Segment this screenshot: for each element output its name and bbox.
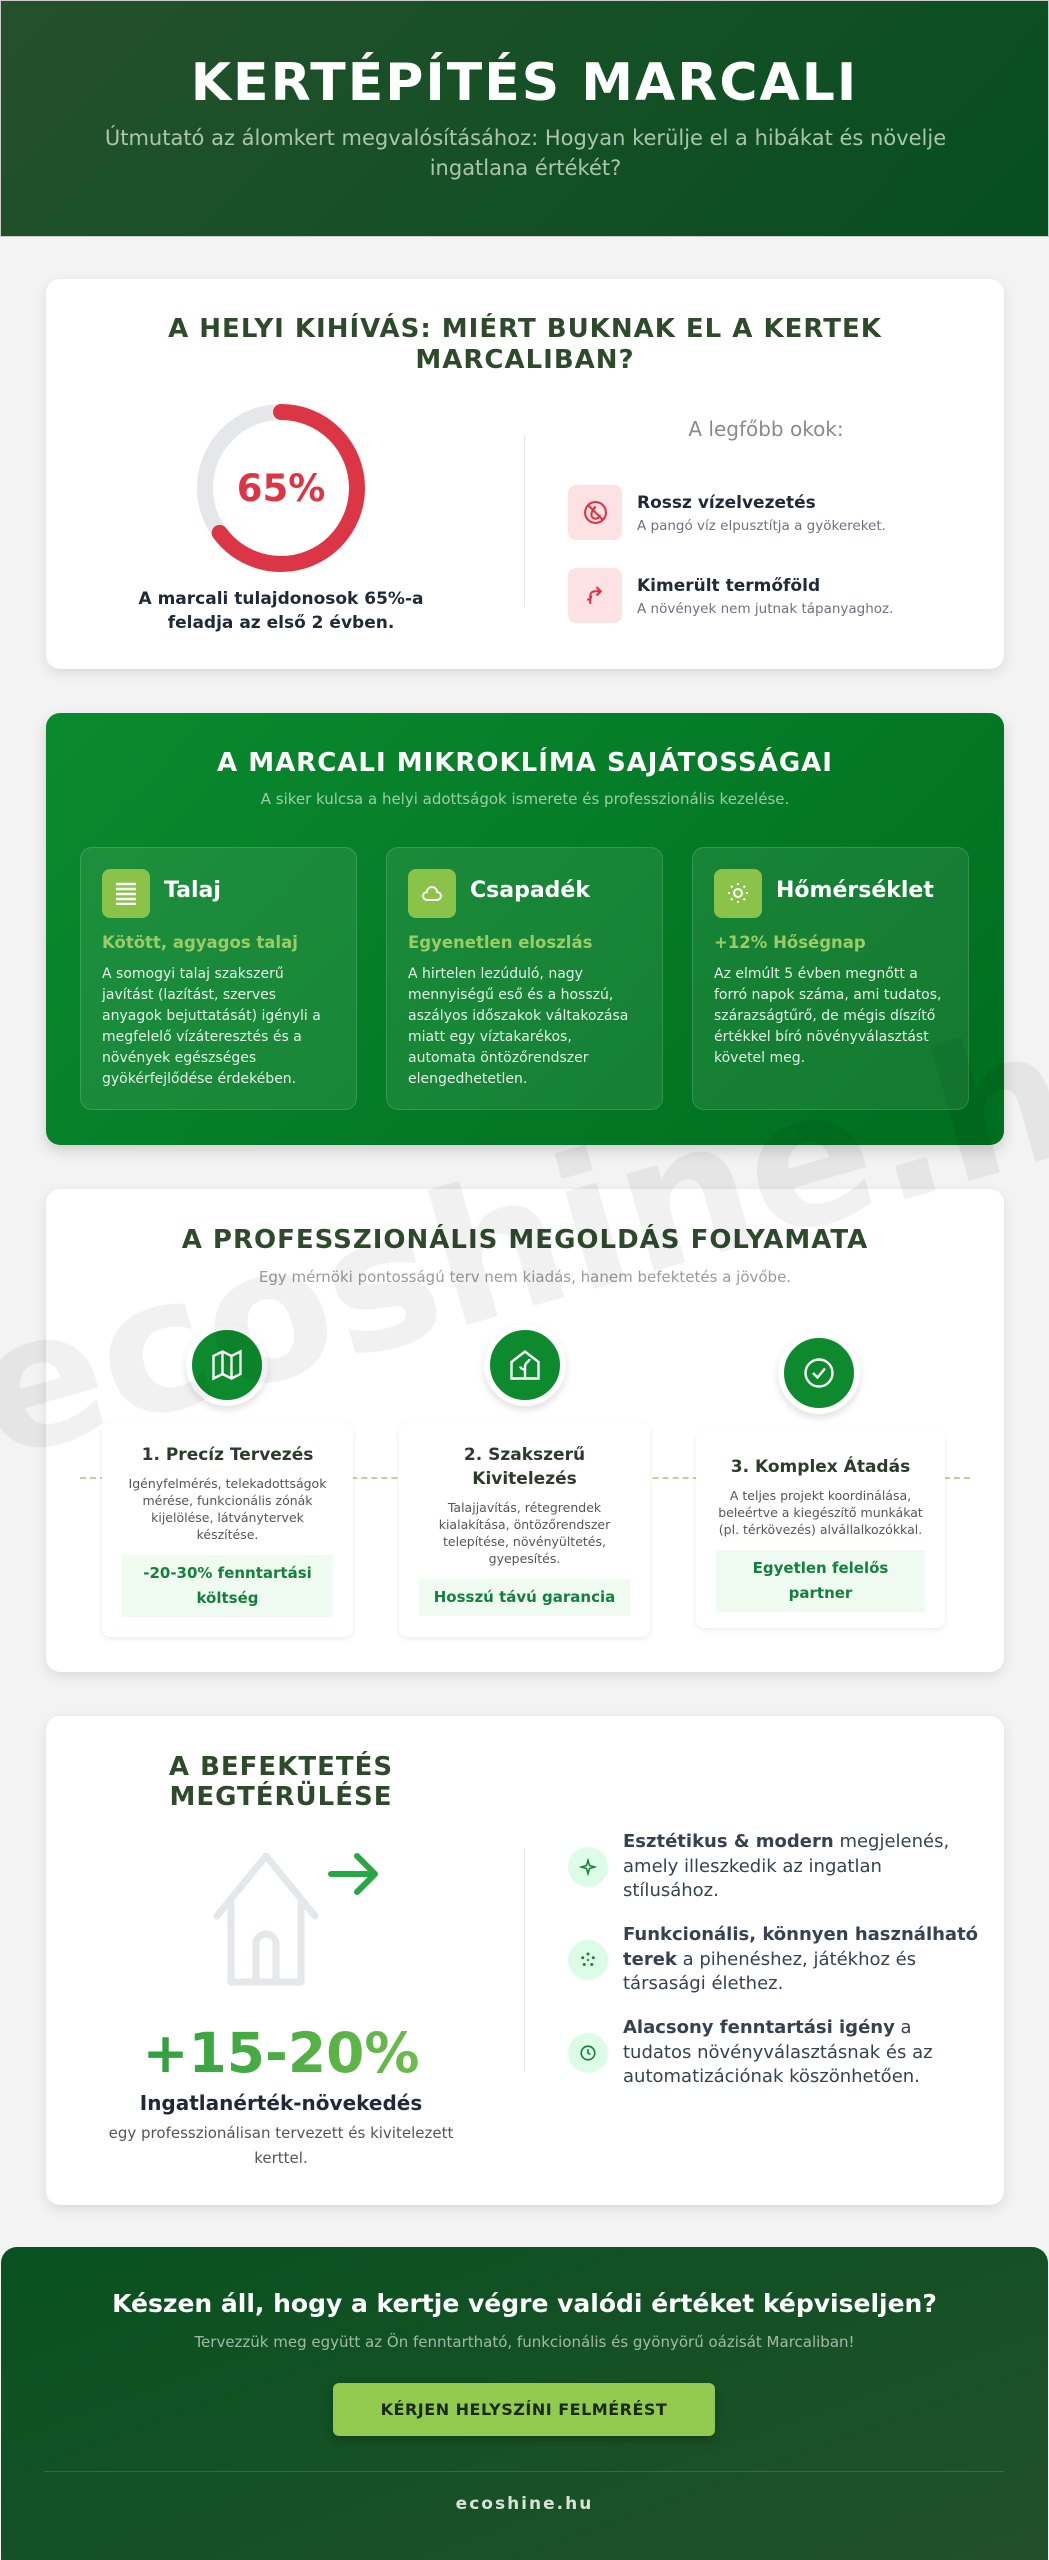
panel: ROI — [46, 1716, 1004, 2205]
card: soil — [80, 847, 357, 1110]
panel: local challenge — [46, 279, 1004, 669]
subheading: Egy mérnöki pontosságú terv nem kiadás, hanem befektetés a jövőbe. — [259, 1268, 791, 1286]
card: temperature: Hőmérséklet — [776, 878, 934, 903]
donut chart — [197, 404, 365, 572]
CTA heading: Készen áll, hogy a kertje végre valódi értéket képviseljen? — [112, 2289, 937, 2318]
stat label: Ingatlanérték-növekedés — [140, 2091, 422, 2115]
icon: soil layers — [102, 869, 150, 918]
reason: soil: Kimerült termőföld — [637, 576, 820, 596]
button: KÉRJEN HELYSZÍNI FELMÉRÉST — [381, 2400, 667, 2419]
heading: A HELYI KIHÍVÁS: MIÉRT BUKNAK EL A KERTEK — [168, 314, 882, 344]
header — [0, 0, 1049, 237]
card: rainfall: Egyenetlen eloszlás — [408, 933, 592, 952]
panel: microclimate — [46, 713, 1004, 1145]
reason: drainage: A pangó víz elpusztítja a gyökereket. — [637, 518, 886, 534]
card: temperature — [692, 847, 969, 1110]
step 3 card: Egyetlen felelős partner — [753, 1559, 888, 1602]
stat description: egy professzionálisan tervezett és kivitelezett kerttel. — [109, 2124, 453, 2167]
button — [333, 2383, 715, 2436]
big stat: +15-20% — [142, 2021, 420, 2085]
step 1 card: 1. Precíz Tervezés — [142, 1445, 313, 1465]
reason: soil: A növények nem jutnak tápanyaghoz. — [637, 601, 893, 617]
heading — [169, 1751, 393, 1812]
step 2 card: Hosszú távú garancia — [434, 1588, 615, 1606]
donut chart: 65% — [237, 467, 325, 510]
icon: house with arrow — [214, 1852, 378, 1986]
footer brand: ecoshine.hu — [456, 2494, 593, 2514]
step 3 card: 3. Komplex Átadás — [731, 1457, 910, 1477]
donut caption: A marcali tulajdonosok 65%-a feladja az első 2 évben. — [138, 589, 424, 633]
panel: ROI: Esztétikus & modern megjelenés, amely illeszkedik az ingatlan stílusához. — [623, 1831, 949, 1901]
heading — [168, 313, 882, 375]
subheading: A siker kulcsa a helyi adottságok ismerete és professzionális kezelése. — [261, 790, 789, 808]
card: soil: A somogyi talaj szakszerű javítást (lazítást, szerves anyagok bejuttatását) igényli a megfelelő vízáteresztés és a növények egészséges gyökérfejlődése érdekében. — [102, 966, 321, 1087]
icon: depleted soil — [568, 568, 622, 623]
panel: ROI: Funkcionális, könnyen használható terek a pihenéshez, játékhoz és társasági élethez. — [623, 1924, 978, 1994]
card: rainfall: A hirtelen lezúduló, nagy mennyiségű eső és a hosszú, aszályos időszakok váltakozása miatt egy víztakarékos, automata öntözőrendszer elengedhetetlen. — [408, 966, 628, 1087]
card: rainfall: Csapadék — [470, 878, 590, 903]
panel: process — [46, 1189, 1004, 1672]
step 2 card — [399, 1423, 650, 1637]
card: rainfall — [386, 847, 663, 1110]
reason: soil — [568, 568, 893, 623]
benefit: functional — [568, 1940, 608, 1980]
card: soil: Talaj — [164, 878, 221, 903]
CTA text: Tervezzük meg együtt az Ön fenntartható, funkcionális és gyönyörű oázisát Marcaliban! — [194, 2333, 855, 2351]
title: KERTÉPÍTÉS MARCALI — [191, 53, 858, 113]
step 2 card: Talajjavítás, rétegrendek kialakítása, öntözőrendszer telepítése, növényültetés, gyepesítés. — [439, 1500, 610, 1566]
subtitle: Útmutató az álomkert megvalósításához: Hogyan kerülje el a hibákat és növelje ingatlana értékét? — [105, 126, 946, 180]
icon: sun — [714, 869, 762, 918]
card: temperature: Az elmúlt 5 évben megnőtt a forró napok száma, ami tudatos, szárazságtűrő, de mégis díszítő értékkel bíró növényválasztást követel meg. — [714, 966, 941, 1066]
heading: A PROFESSZIONÁLIS MEGOLDÁS FOLYAMATA — [182, 1225, 868, 1255]
step 1 card: -20-30% fenntartási költség — [143, 1564, 312, 1607]
icon: cloud — [408, 869, 456, 918]
card: soil: Kötött, agyagos talaj — [102, 933, 298, 952]
step 2 card: 2. Szakszerű — [464, 1445, 585, 1465]
step 1 card: Igényfelmérés, telekadottságok mérése, funkcionális zónák kijelölése, látványtervek készítése. — [129, 1476, 326, 1542]
footer CTA — [1, 2247, 1048, 2560]
step 3 card — [696, 1430, 945, 1628]
card: temperature: +12% Hőségnap — [714, 933, 866, 952]
icon: no water — [568, 485, 622, 540]
icon: map — [186, 1324, 268, 1406]
icon: check — [778, 1332, 860, 1414]
heading: A BEFEKTETÉS — [169, 1752, 393, 1782]
reasons heading: A legfőbb okok: — [688, 417, 844, 441]
heading: MEGTÉRÜLÉSE — [170, 1782, 392, 1812]
step 3 card: A teljes projekt koordinálása, beleértve a kiegészítő munkákat (pl. térkövezés) alvállalkozókkal. — [718, 1488, 923, 1537]
panel: ROI: Alacsony fenntartási igény a tudatos növényválasztásnak és az automatizációnak köszönhetően. — [623, 2017, 933, 2087]
reason: drainage: Rossz vízelvezetés — [637, 493, 816, 513]
icon: house with plant — [484, 1324, 566, 1406]
heading: A MARCALI MIKROKLÍMA SAJÁTOSSÁGAI — [217, 748, 833, 778]
benefit: low maintenance — [568, 2033, 608, 2073]
step 1 card — [102, 1423, 353, 1637]
benefit: aesthetic — [568, 1847, 608, 1887]
step 2 card: Kivitelezés — [472, 1469, 577, 1489]
reason: drainage — [568, 485, 886, 540]
heading: MARCALIBAN? — [415, 345, 635, 375]
